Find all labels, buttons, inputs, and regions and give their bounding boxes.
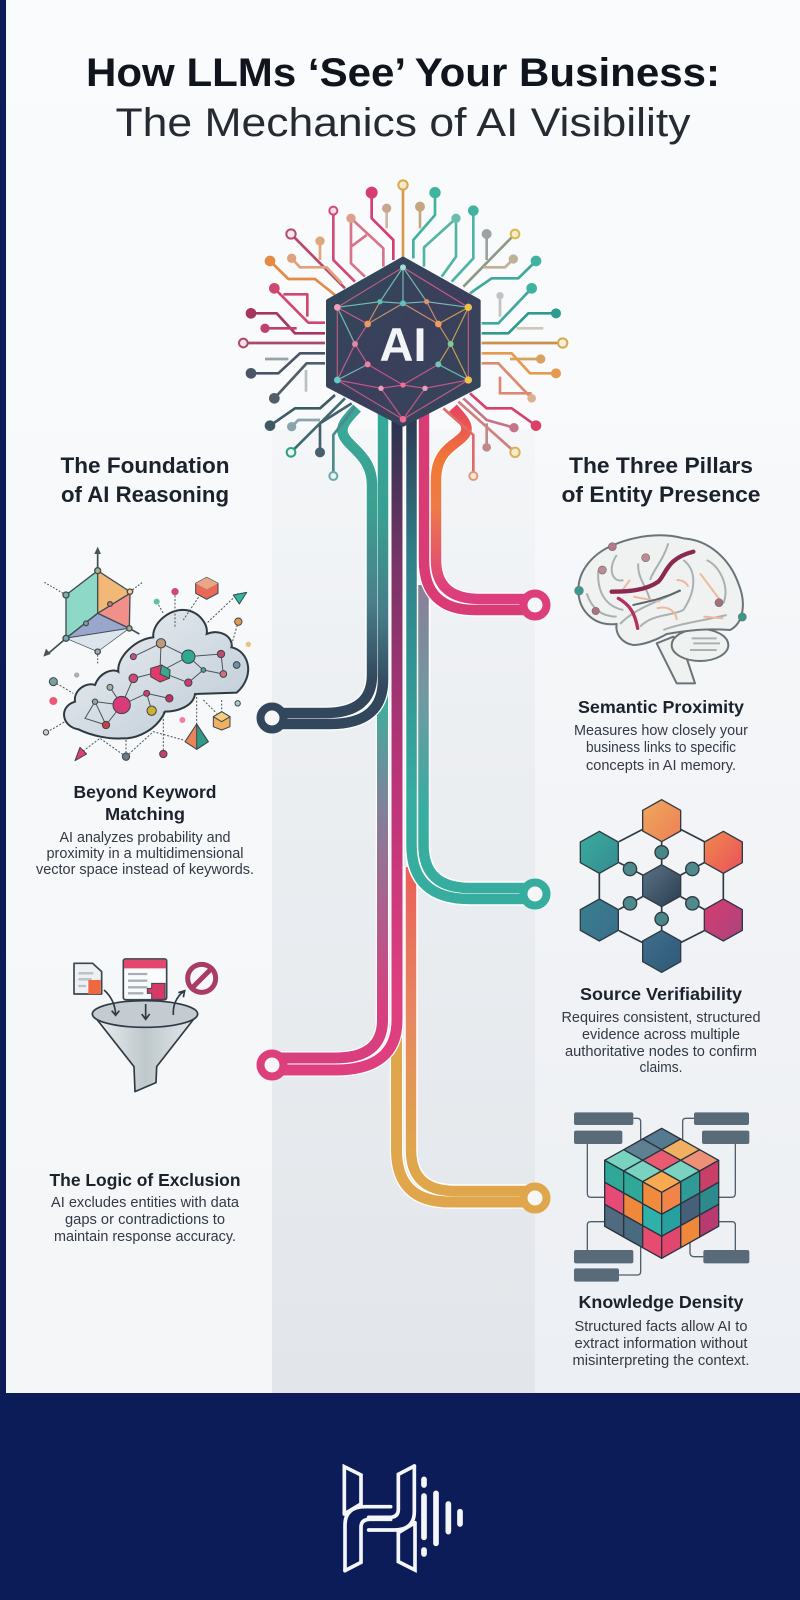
cerebellum: [672, 629, 728, 661]
document with puzzle: [74, 963, 102, 994]
heading: foundation: The Foundation: [60, 453, 230, 478]
text: source verifiability: claims.: [640, 1060, 682, 1076]
text: knowledge density: Structured facts allow AI to: [574, 1319, 748, 1335]
trace terminals: [239, 180, 567, 480]
heading: pillars: The Three Pillars: [569, 453, 753, 478]
text: knowledge density: misinterpreting the context.: [572, 1353, 750, 1369]
text: semantic proximity: Semantic Proximity: [578, 697, 744, 717]
text: beyond keyword matching: proximity in a multidimensional: [46, 846, 244, 862]
text: beyond keyword matching: [36, 782, 254, 878]
icon: hexagon network: [580, 800, 742, 972]
text: semantic proximity: [574, 697, 748, 774]
heading: foundation: of AI Reasoning: [61, 482, 229, 507]
hex: teal: [580, 831, 618, 873]
heading: pillars: of Entity Presence: [562, 482, 760, 507]
network nodes: [43, 588, 251, 760]
callout lines: [587, 1118, 735, 1275]
text: semantic proximity: Measures how closely your: [574, 723, 748, 739]
prohibited sign: [188, 964, 216, 992]
heading: pillars: [562, 453, 760, 507]
text: logic of exclusion: gaps or contradictions to: [65, 1212, 225, 1228]
callout bars: [574, 1112, 749, 1282]
circuit traces: [243, 185, 563, 476]
hex: coral: [704, 831, 742, 873]
text: semantic proximity: concepts in AI memory.: [586, 758, 736, 774]
icon: funnel: [74, 959, 216, 1092]
heading: foundation: [60, 453, 230, 507]
icon: knowledge cube: [574, 1112, 749, 1282]
text: logic of exclusion: The Logic of Exclusion: [50, 1170, 240, 1190]
text: beyond keyword matching: Beyond Keyword: [74, 782, 216, 802]
text: source verifiability: [562, 984, 761, 1076]
left navy edge: [0, 0, 6, 1394]
brain stem: [657, 637, 695, 683]
centre column shading: [272, 430, 535, 1394]
footer logo: [344, 1466, 460, 1571]
mesh lines: [337, 267, 468, 419]
text: source verifiability: Requires consistent, structured: [562, 1010, 761, 1026]
text: beyond keyword matching: AI analyzes probability and: [60, 830, 231, 846]
central pipelines: [260, 400, 546, 1210]
hex: dark centre: [643, 865, 681, 907]
hex: magenta: [704, 899, 742, 941]
pipeline: pink to semantic proximity: [424, 400, 546, 616]
text: knowledge density: Knowledge Density: [578, 1292, 744, 1312]
cloud: [64, 610, 248, 739]
text: semantic proximity: business links to specific: [586, 740, 736, 756]
text: beyond keyword matching: Matching: [105, 804, 185, 824]
mesh nodes: [334, 264, 472, 423]
pipeline: gold to knowledge density: [396, 867, 546, 1210]
brain nodes: [575, 543, 746, 621]
funnel mouth: [92, 1001, 198, 1027]
flow arrows: [104, 990, 185, 1019]
highlighted pathways: [612, 552, 693, 628]
hex: orange: [643, 800, 681, 842]
pipeline: teal to source verifiability: [412, 400, 546, 906]
AI chip with circuit traces: [239, 180, 567, 480]
text: source verifiability: Source Verifiability: [580, 984, 742, 1004]
cubelets: [605, 1128, 719, 1258]
title: How LLMs ‘See’ Your Business:: [86, 51, 720, 95]
text: beyond keyword matching: vector space instead of keywords.: [36, 862, 254, 878]
text: logic of exclusion: [50, 1170, 240, 1245]
icon: vector space cloud: [43, 547, 251, 761]
AI label: AI: [380, 318, 426, 371]
floating shapes: [75, 577, 247, 761]
text: source verifiability: evidence across multiple: [582, 1027, 740, 1043]
monogram H: [344, 1466, 415, 1571]
title: [86, 51, 720, 145]
title: The Mechanics of AI Visibility: [116, 101, 690, 145]
hex: blue teal: [580, 899, 618, 941]
text: source verifiability: authoritative nodes to confirm: [565, 1044, 757, 1060]
right column shading: [535, 430, 800, 1394]
sound bars: [424, 1479, 460, 1554]
hexagon body: [328, 259, 479, 425]
sulci: [587, 543, 727, 650]
hex: blue: [643, 930, 681, 972]
text: logic of exclusion: maintain response accuracy.: [54, 1229, 236, 1245]
cerebrum outline: [578, 535, 743, 645]
window with puzzle: [123, 959, 167, 1000]
pipeline: magenta to logic of exclusion: [260, 400, 397, 1076]
text: knowledge density: [572, 1292, 750, 1369]
text: knowledge density: extract information without: [574, 1336, 748, 1352]
text: logic of exclusion: AI excludes entities with data: [51, 1195, 239, 1211]
funnel body: [93, 1014, 198, 1092]
icon: brain: [575, 535, 746, 683]
footer band: [0, 1393, 800, 1600]
geometric solid: [43, 547, 143, 663]
network inside cloud: [47, 585, 238, 757]
pipeline: dark to beyond keyword matching: [260, 400, 383, 730]
